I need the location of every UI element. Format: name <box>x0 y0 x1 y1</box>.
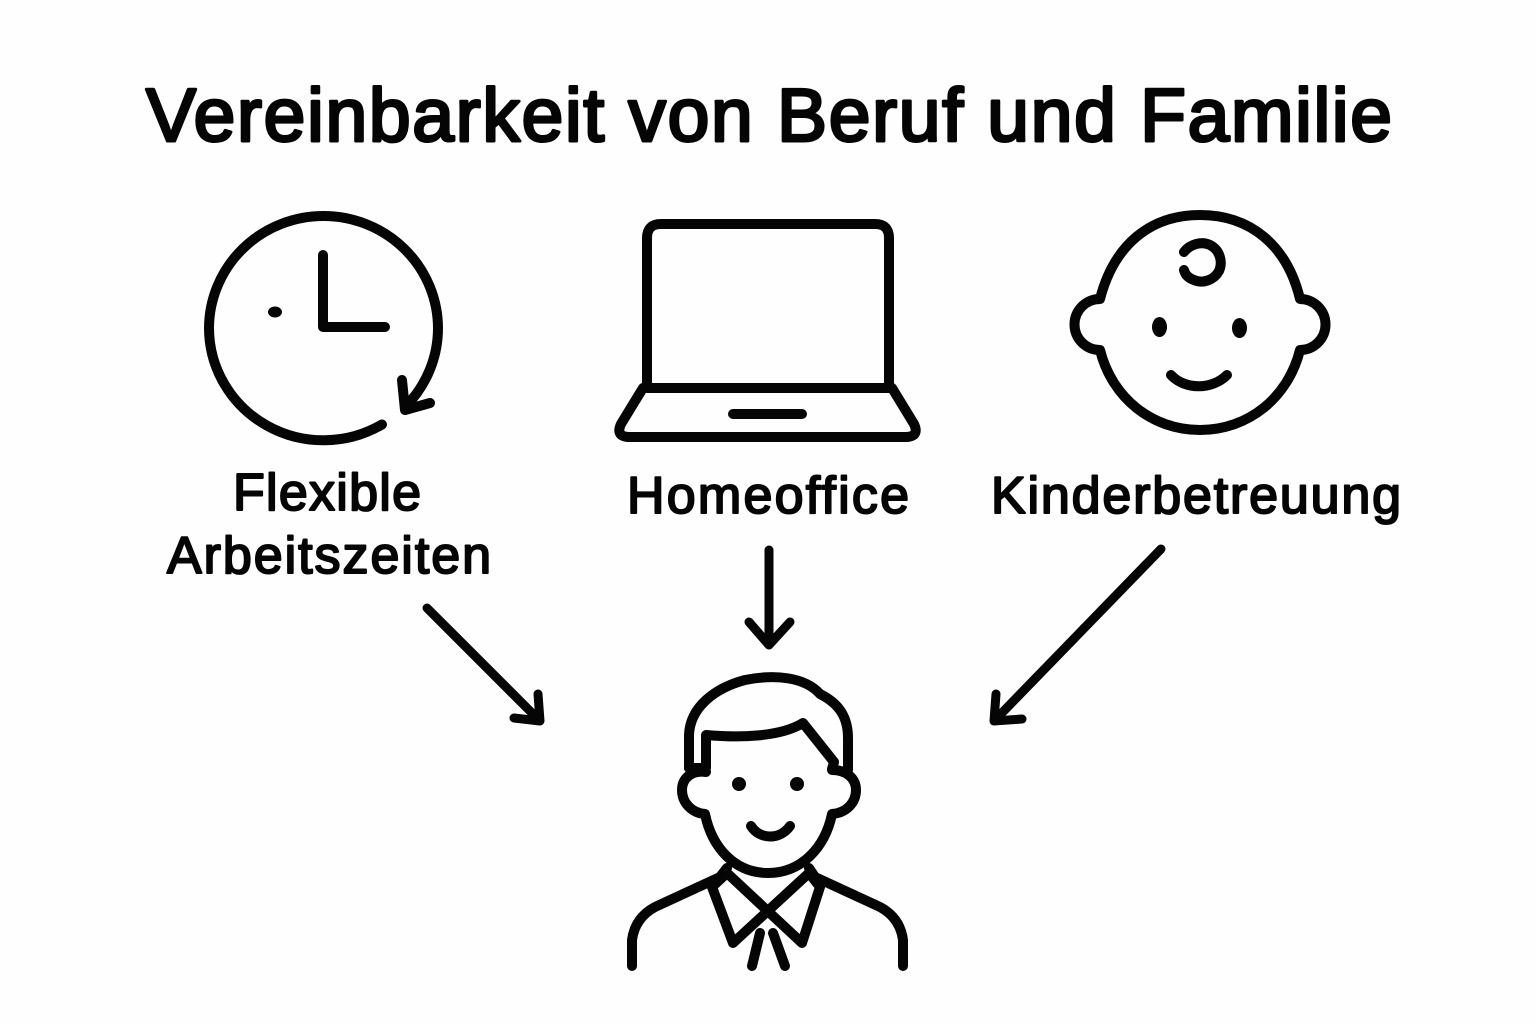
title: Vereinbarkeit von Beruf und Familie <box>146 73 1392 157</box>
label: Homeoffice: Homeoffice <box>627 467 909 525</box>
icon: baby face <box>1074 215 1326 430</box>
label: Flexible Arbeitszeiten <box>167 464 491 585</box>
label: Flexible Arbeitszeiten: Flexible <box>233 464 421 522</box>
icon: laptop <box>619 224 916 437</box>
arrow: right <box>994 549 1161 721</box>
label: Kinderbetreuung: Kinderbetreuung <box>991 467 1401 525</box>
label: Flexible Arbeitszeiten: Arbeitszeiten <box>167 527 491 585</box>
arrow: left <box>427 608 540 721</box>
arrow: centre <box>749 550 790 645</box>
icon: person <box>632 677 903 966</box>
icon: clock <box>209 216 438 440</box>
